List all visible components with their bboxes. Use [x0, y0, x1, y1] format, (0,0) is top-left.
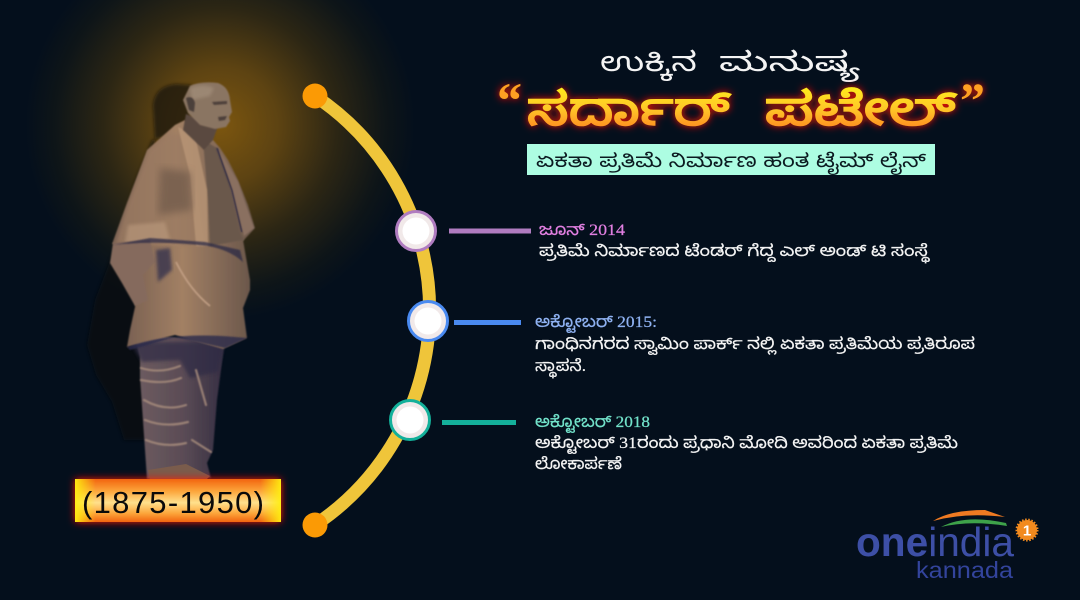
entry: October 2015: ಸ್ಥಾಪನೆ. [535, 358, 586, 379]
date box (1875-1950): (1875-1950) [82, 485, 264, 520]
statue face shading [212, 101, 227, 121]
statue scarf strip [178, 127, 208, 246]
subtitle banner: ಏಕತಾ ಪ್ರತಿಮೆ ನಿರ್ಮಾಣ ಹಂತ ಟೈಮ್ ಲೈನ್ [536, 151, 927, 176]
statue forehead highlight [190, 86, 214, 100]
entry: October 2015: ಅಕ್ಟೋಬರ್ 2015: [535, 314, 657, 333]
statue dhoti folds [141, 366, 211, 452]
statue neck [183, 114, 218, 150]
entry: October 2018 [535, 414, 958, 473]
statue shawl light patch [125, 222, 170, 243]
statue head [183, 82, 232, 129]
statue chest edge line [217, 148, 242, 232]
title: iron man [600, 47, 860, 83]
statue glow [0, 0, 440, 340]
title: Sardar Patel: ” [960, 72, 985, 128]
title: Sardar Patel [497, 72, 985, 135]
logo badge: 1 [1023, 522, 1031, 540]
statue folded arm [110, 240, 155, 306]
subtitle banner [527, 144, 935, 176]
logo swoosh orange [933, 510, 1005, 521]
logo subtitle: kannada [916, 557, 1013, 583]
statue shawl dark patch [158, 168, 192, 215]
statue ear [186, 97, 195, 112]
entry: June 2014 [539, 222, 930, 264]
title: Sardar Patel: ಸರ್ದಾರ್ [527, 83, 731, 135]
title: iron man: ಮನುಷ್ಯ [719, 47, 860, 83]
title: iron man: ಉಕ್ಕಿನ [600, 47, 697, 81]
entry: October 2018: ಅಕ್ಟೋಬರ್ 31ರಂದು ಪ್ರಧಾನಿ ಮೋದಿ ಅವರಿಂದ ಏಕತಾ ಪ್ರತಿಮೆ [535, 435, 958, 454]
entry: October 2018: ಅಕ್ಟೋಬರ್ 2018 [535, 414, 650, 433]
logo badge [1017, 520, 1037, 540]
entry: October 2015 [535, 314, 975, 379]
title: Sardar Patel: “ [497, 72, 522, 128]
statue chest [203, 140, 244, 246]
arc end dot [302, 512, 328, 538]
statue of Sardar Patel [110, 82, 255, 481]
entry: June 2014: ಜೂನ್ 2014 [539, 222, 625, 239]
statue feet [148, 464, 210, 481]
statue shawl left band [116, 134, 206, 246]
statue kurta [127, 235, 250, 349]
logo swoosh green [941, 519, 1007, 527]
title: Sardar Patel: ಪಟೇಲ್ [765, 83, 957, 135]
marker: June 2014 [396, 212, 531, 250]
statue upper leg shadow [130, 342, 225, 378]
statue hem shadow [113, 238, 243, 262]
entry: October 2015: ಗಾಂಧಿನಗರದ ಸ್ವಾಮಿಂ ಪಾರ್ಕ್ ನಲ್ಲಿ ಏಕತಾ ಪ್ರತಿಮೆಯ ಪ್ರತಿರೂಪ [535, 336, 975, 355]
statue legs [134, 335, 225, 479]
entry: October 2018: ಲೋಕಾರ್ಪಣೆ [535, 456, 622, 473]
arc start dot [302, 84, 328, 108]
logo: oneindia kannada [856, 510, 1037, 583]
logo wordmark: oneindia [856, 519, 1014, 565]
statue shawl and chest [112, 120, 255, 246]
entry: June 2014: ಪ್ರತಿಮೆ ನಿರ್ಮಾಣದ ಟೆಂಡರ್ ಗೆದ್ದ ಎಲ್ ಅಂಡ್ ಟಿ ಸಂಸ್ಥೆ [539, 243, 930, 264]
statue right scarf strip [219, 150, 254, 236]
statue shadow [87, 84, 192, 440]
timeline arc [302, 84, 430, 538]
marker: October 2015 [408, 302, 521, 340]
marker: October 2018 [390, 400, 516, 440]
